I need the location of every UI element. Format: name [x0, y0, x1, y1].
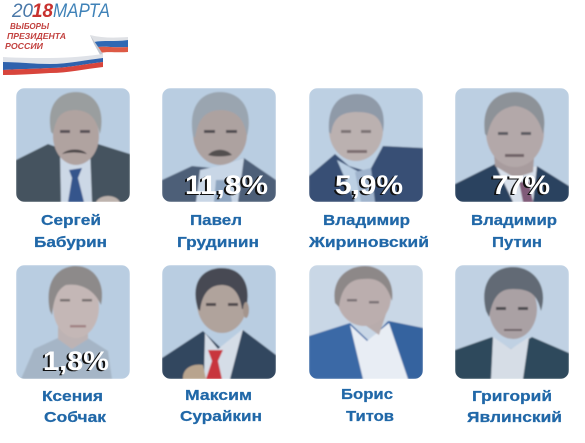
- candidate card: Грудинин: [162, 88, 276, 251]
- candidate card: Путин: Путин: [492, 234, 542, 251]
- portrait: [162, 265, 276, 379]
- portrait: [309, 265, 423, 379]
- name: Максим: [185, 387, 252, 404]
- candidate card: Бабурин: [16, 88, 130, 251]
- logo subtitle: ВЫБОРЫ: [10, 21, 49, 31]
- logo subtitle: РОССИИ: [5, 41, 44, 51]
- candidate card: Титов: [309, 265, 423, 425]
- result: 1,8%: 1,8%: [43, 346, 109, 376]
- logo subtitle: ПРЕЗИДЕНТА: [7, 31, 66, 41]
- logo subtitle: [5, 21, 66, 51]
- logo ribbon: [3, 35, 128, 75]
- result: 77%: 77%: [492, 170, 550, 200]
- portrait: [455, 265, 569, 379]
- candidate card: Сурайкин: Сурайкин: [180, 408, 262, 425]
- portrait: [162, 88, 276, 202]
- candidate card: Титов: Титов: [346, 408, 394, 425]
- candidate card: Путин: [455, 88, 569, 251]
- name: Сергей: [41, 212, 101, 229]
- logo date: 20: [11, 1, 33, 22]
- candidate card: Явлинский: Явлинский: [467, 409, 562, 426]
- candidate card: Собчак: [16, 265, 130, 426]
- name: Владимир: [323, 212, 410, 229]
- logo date: 18: [32, 1, 53, 22]
- portrait: [309, 88, 423, 202]
- candidate card: Грудинин: Грудинин: [177, 234, 259, 251]
- candidate card: Жириновский: Жириновский: [308, 234, 429, 251]
- logo date: МАРТА: [53, 1, 110, 22]
- portrait: [455, 88, 569, 202]
- name: Павел: [190, 212, 242, 229]
- candidate card: Собчак: Собчак: [44, 409, 107, 426]
- name: Григорий: [472, 388, 552, 405]
- name: Борис: [341, 386, 393, 403]
- portrait: [16, 265, 130, 379]
- name: Ксения: [42, 388, 103, 405]
- name: Владимир: [471, 212, 557, 229]
- logo: 2018 Марта: [3, 1, 128, 75]
- logo date: [11, 1, 110, 22]
- candidate card: Явлинский: [455, 265, 569, 426]
- candidate card: Сурайкин: [162, 265, 276, 425]
- result: 5,9%: 5,9%: [335, 170, 403, 200]
- candidate card: Бабурин: Бабурин: [34, 234, 107, 251]
- candidate card: Жириновский: [308, 88, 429, 251]
- result: 11,8%: 11,8%: [185, 170, 268, 200]
- portrait: [16, 88, 130, 202]
